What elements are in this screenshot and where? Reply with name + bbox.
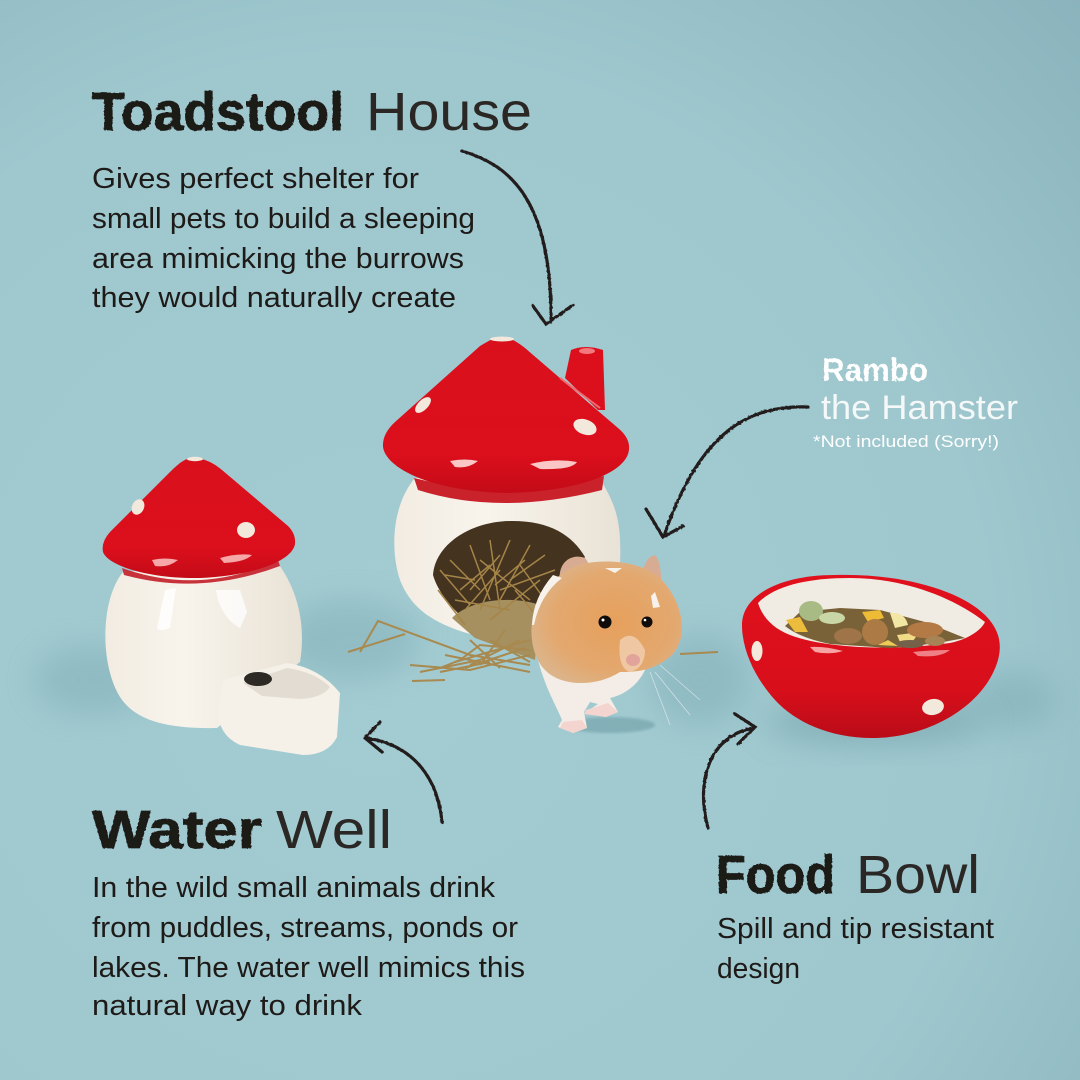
- label: Rambo the Hamster: *Not included (Sorry!): [813, 432, 999, 451]
- text: toadstool house description: area mimicking the burrows: [92, 243, 464, 275]
- hamster ears: [560, 557, 590, 593]
- well body: [105, 562, 302, 728]
- title: Food Bowl: Bowl: [856, 845, 980, 905]
- label: Rambo the Hamster: the Hamster: [821, 389, 1018, 427]
- title: Water Well: Water: [92, 800, 262, 860]
- text: toadstool house description: Gives perfect shelter for: [92, 163, 419, 195]
- icon: food bowl: [742, 575, 1000, 742]
- text: water well description: natural way to drink: [92, 990, 363, 1022]
- text: toadstool house description: small pets to build a sleeping: [92, 203, 475, 235]
- arrow: to toadstool house: [462, 151, 573, 324]
- title: Water Well: [92, 800, 392, 860]
- water dish: [218, 663, 340, 755]
- bowl interior: [758, 578, 985, 648]
- title: Food Bowl: [716, 845, 980, 905]
- house body: [394, 478, 620, 640]
- title: Food Bowl: Food: [716, 845, 835, 905]
- text: water well description: from puddles, streams, ponds or: [92, 912, 518, 944]
- text: water well description: In the wild small animals drink: [92, 872, 496, 904]
- well cap: [122, 560, 280, 584]
- icon: water well toadstool: [103, 457, 340, 755]
- arrow: to food bowl: [703, 714, 755, 828]
- title: Toadstool House: House: [366, 82, 532, 142]
- hay on floor: [348, 621, 718, 681]
- text: food bowl description: design: [717, 953, 800, 985]
- hamster head and fur: [531, 562, 682, 683]
- arrow: to hamster: [646, 407, 808, 537]
- food: [785, 601, 965, 648]
- text: toadstool house description: [92, 163, 475, 314]
- text: water well description: lakes. The water well mimics this: [92, 952, 525, 984]
- icon: toadstool house: [348, 336, 718, 681]
- arrow: to water well: [365, 722, 442, 822]
- text: food bowl description: Spill and tip resistant: [717, 913, 994, 945]
- title: Toadstool House: Toadstool: [92, 82, 344, 142]
- house collar: [414, 476, 604, 503]
- text: food bowl description: [717, 913, 994, 985]
- house cap: [383, 337, 629, 493]
- icon: hamster: [531, 556, 700, 733]
- label: Rambo the Hamster: [813, 352, 1018, 451]
- doorway with hay: [433, 521, 585, 640]
- label: Rambo the Hamster: Rambo: [822, 352, 928, 388]
- title: Toadstool House: [92, 82, 532, 142]
- hamster lower body: [538, 655, 650, 733]
- floor shadows: [35, 600, 1055, 728]
- title: Water Well: Well: [276, 800, 392, 860]
- text: water well description: [92, 872, 525, 1022]
- text: toadstool house description: they would naturally create: [92, 282, 456, 314]
- chimney: [565, 347, 605, 410]
